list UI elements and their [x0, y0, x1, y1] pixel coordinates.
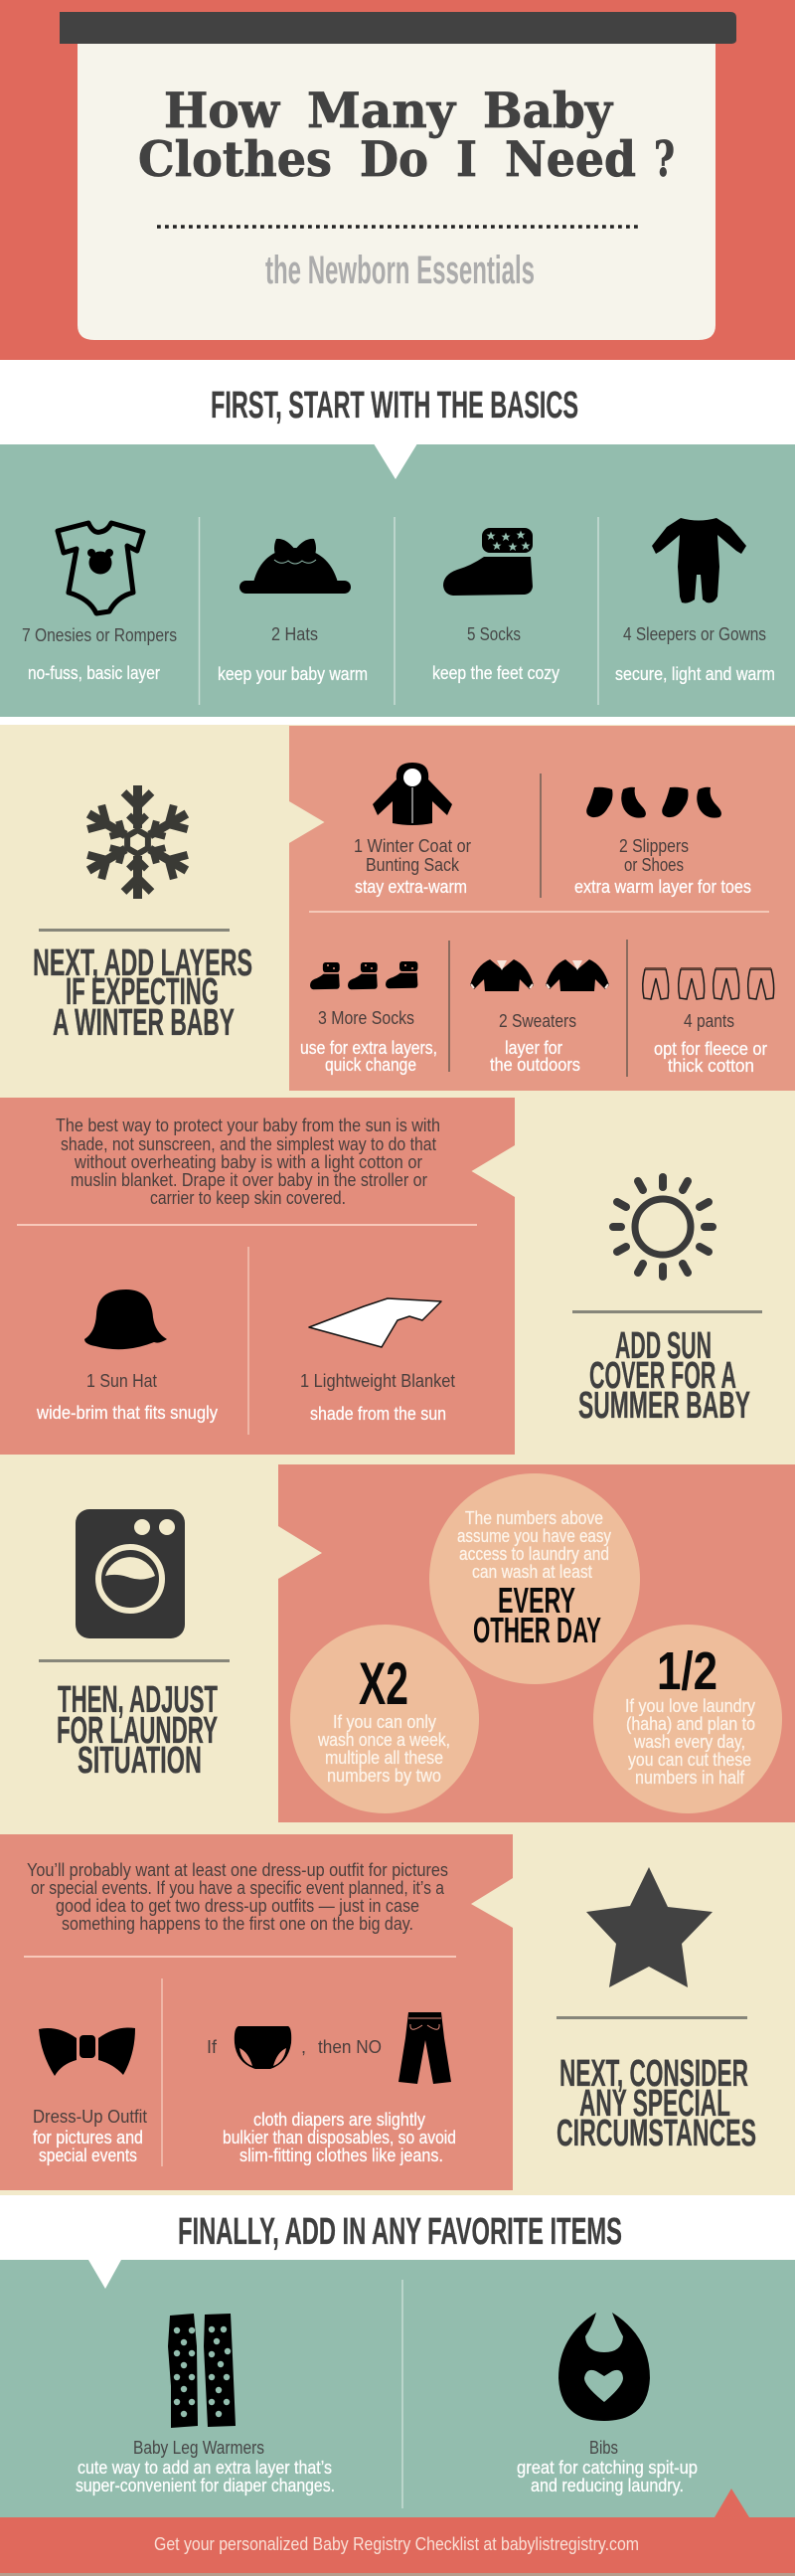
panel: special items [0, 1834, 513, 2190]
winter item text: sweaters: 2 Sweaters [499, 1011, 576, 1031]
basics labels: 5 Socks [467, 624, 521, 644]
winter item text: slippers: extra warm layer for toes [574, 877, 751, 897]
winter item text: coat: stay extra-warm [355, 877, 467, 897]
icon: slippers [586, 787, 721, 818]
title: I [456, 130, 477, 188]
panel: favorites [0, 2260, 795, 2517]
icon: coat [373, 763, 452, 825]
circle: x2 [290, 1625, 479, 1813]
diaper and jeans rule [207, 2012, 451, 2084]
diaper note [223, 2110, 456, 2165]
blanket text: shade from the sun [310, 1404, 446, 1424]
section: summer [0, 1098, 762, 1455]
title [138, 82, 675, 188]
icon: washing machine [76, 1509, 185, 1638]
diaper and jeans rule: If [207, 2037, 218, 2057]
leg warmers text: Baby Leg Warmers [133, 2438, 264, 2458]
winter item text: pants [654, 1011, 767, 1076]
title: Need [505, 130, 636, 188]
circle: one half: numbers in half [635, 1768, 745, 1788]
icon: hat [239, 539, 351, 594]
circle: x2: wash once a week, [317, 1730, 450, 1750]
basics labels: 2 Hats [271, 624, 318, 644]
basics labels: 7 Onesies or Rompers [22, 625, 177, 645]
title: ? [654, 130, 675, 188]
dress-up text: for pictures and [33, 2128, 143, 2147]
basics notes: keep the feet cozy [432, 663, 559, 683]
winter item text: socks: 3 More Socks [318, 1008, 414, 1028]
bibs text: Bibs [589, 2438, 618, 2458]
dress-up text: Dress-Up Outfit [33, 2107, 147, 2127]
circle: every other day: access to laundry and [459, 1544, 609, 1564]
icon: snowflake [81, 785, 194, 899]
circle: one half: (haha) and plan to [626, 1714, 755, 1734]
section: laundry [39, 1464, 795, 1822]
footer: Get your personalized Baby Registry Checklist at babylistregistry.com [154, 2534, 639, 2554]
title: Many [307, 82, 457, 139]
basics labels: 4 Sleepers or Gowns [623, 624, 766, 644]
winter item text: coat: Bunting Sack [366, 855, 460, 875]
icon: leg warmers [168, 2314, 236, 2428]
title: Baby [483, 82, 613, 139]
winter item text: sweaters: the outdoors [490, 1055, 580, 1075]
sun intro text: without overheating baby is with a light cotton or [74, 1152, 422, 1172]
special intro text: good idea to get two dress-up outfits — just in case [56, 1896, 419, 1916]
panel: sun items [0, 1098, 515, 1455]
circle: x2: X2 [359, 1650, 408, 1717]
basics labels [22, 624, 766, 645]
sun hat text [36, 1371, 218, 1423]
title: Clothes [138, 130, 332, 188]
special intro text: something happens to the first one on the big day. [62, 1914, 413, 1934]
sun hat text: 1 Sun Hat [86, 1371, 157, 1391]
heading: winter: A WINTER BABY [53, 1002, 235, 1044]
icon: star [586, 1867, 713, 1987]
circle: one half: you can cut these [628, 1750, 751, 1770]
dress-up text: special events [39, 2146, 137, 2165]
basics notes [28, 663, 775, 684]
special intro text: or special events. If you have a specific event planned, it’s a [31, 1878, 445, 1898]
heading: first, start with the basics: FIRST, START WITH THE BASICS [211, 385, 578, 427]
bibs text: great for catching spit-up [517, 2458, 698, 2478]
winter item text: pants: thick cotton [668, 1056, 754, 1076]
title: How [164, 82, 281, 139]
blanket text [300, 1371, 455, 1424]
winter item text: socks: quick change [325, 1055, 416, 1075]
circle: x2: multiple all these [325, 1748, 443, 1768]
special intro text [27, 1860, 448, 1934]
sun intro text: carrier to keep skin covered. [150, 1188, 346, 1208]
heading: winter: IF EXPECTING [66, 971, 219, 1013]
dotted divider [157, 225, 639, 229]
sun intro text: The best way to protect your baby from the sun is with [56, 1116, 440, 1135]
icon: jeans [398, 2012, 451, 2084]
icon: sweaters [470, 959, 609, 991]
heading: winter: NEXT, ADD LAYERS [33, 943, 252, 984]
diaper note: slim-fitting clothes like jeans. [239, 2146, 443, 2165]
leg warmers text: super-convenient for diaper changes. [76, 2476, 335, 2495]
icon: pants [643, 968, 774, 999]
basics notes: secure, light and warm [615, 664, 775, 684]
diaper note: cloth diapers are slightly [253, 2110, 425, 2130]
icon: blanket [309, 1298, 441, 1347]
bibs text [517, 2438, 698, 2495]
dress-up text [33, 2107, 147, 2165]
diaper and jeans rule: then NO [318, 2037, 382, 2057]
circle: every other day: OTHER DAY [473, 1610, 601, 1650]
circle: every other day [429, 1473, 640, 1684]
circle: every other day: assume you have easy [457, 1526, 611, 1546]
panel: basics [0, 444, 795, 717]
circle: x2: If you can only [333, 1712, 436, 1732]
heading: special [556, 2053, 756, 2154]
winter item text: pants: 4 pants [684, 1011, 734, 1031]
heading: summer [578, 1325, 750, 1427]
section: winter [33, 726, 795, 1091]
winter item text: socks: use for extra layers, [300, 1038, 437, 1058]
icon: bow tie [39, 2027, 135, 2076]
basics notes: keep your baby warm [218, 664, 368, 684]
heading: laundry: THEN, ADJUST [58, 1679, 218, 1721]
icon: diaper [235, 2026, 291, 2069]
circle: every other day: EVERY [498, 1580, 575, 1621]
top bar [60, 12, 736, 44]
heading: laundry: FOR LAUNDRY [57, 1710, 218, 1752]
card [78, 44, 716, 340]
circle: every other day: The numbers above [465, 1508, 603, 1528]
bibs text: and reducing laundry. [531, 2476, 684, 2495]
header panel [0, 0, 795, 360]
icon: bib [558, 2313, 650, 2421]
circle: x2: numbers by two [327, 1766, 441, 1786]
winter item text: slippers [574, 836, 751, 897]
winter item text: sweaters [490, 1011, 580, 1075]
heading: laundry [57, 1679, 218, 1782]
basics notes: no-fuss, basic layer [28, 663, 160, 683]
sun intro text: muslin blanket. Drape it over baby in the stroller or [71, 1170, 427, 1190]
winter item text: coat [354, 836, 471, 897]
icon: sun hat [84, 1289, 167, 1349]
circle: one half: wash every day, [633, 1732, 745, 1752]
icon: sock [443, 528, 533, 596]
heading: laundry: SITUATION [78, 1740, 202, 1782]
winter item text: socks [300, 1008, 437, 1075]
sun hat text: wide-brim that fits snugly [36, 1403, 218, 1423]
winter item text: slippers: or Shoes [624, 855, 684, 875]
winter item text: pants: opt for fleece or [654, 1039, 767, 1059]
panel: winter items [289, 726, 795, 1091]
special intro text: You’ll probably want at least one dress-up outfit for pictures [27, 1860, 448, 1880]
circle: every other day: can wash at least [472, 1562, 592, 1582]
diaper and jeans rule: , [301, 2037, 306, 2057]
sun intro text: shade, not sunscreen, and the simplest way to do that [61, 1134, 436, 1154]
title: Do [360, 130, 428, 188]
icon: onesie [58, 523, 143, 613]
circle: one half: 1/2 [657, 1641, 717, 1701]
diaper note: bulkier than disposables, so avoid [223, 2128, 456, 2147]
winter item text: sweaters: layer for [505, 1038, 562, 1058]
heading: summer: ADD SUN [615, 1325, 712, 1367]
heading: winter [33, 943, 252, 1044]
footer [0, 2489, 795, 2576]
blanket text: 1 Lightweight Blanket [300, 1371, 455, 1391]
icon: more socks [310, 961, 417, 989]
section: special circumstances [0, 1834, 756, 2190]
sun intro text [56, 1116, 440, 1208]
winter item text: slippers: 2 Slippers [619, 836, 689, 856]
icon: sleeper [652, 518, 746, 603]
circle: one half: If you love laundry [625, 1696, 755, 1716]
icon: sun [613, 1177, 713, 1277]
subtitle: the Newborn Essentials [265, 249, 535, 292]
winter item text: coat: 1 Winter Coat or [354, 836, 471, 856]
panel: laundry adjustments [278, 1464, 795, 1822]
leg warmers text: cute way to add an extra layer that’s [78, 2458, 332, 2478]
cream background [0, 725, 795, 2195]
circle: one half [593, 1625, 782, 1813]
leg warmers text [76, 2438, 335, 2495]
